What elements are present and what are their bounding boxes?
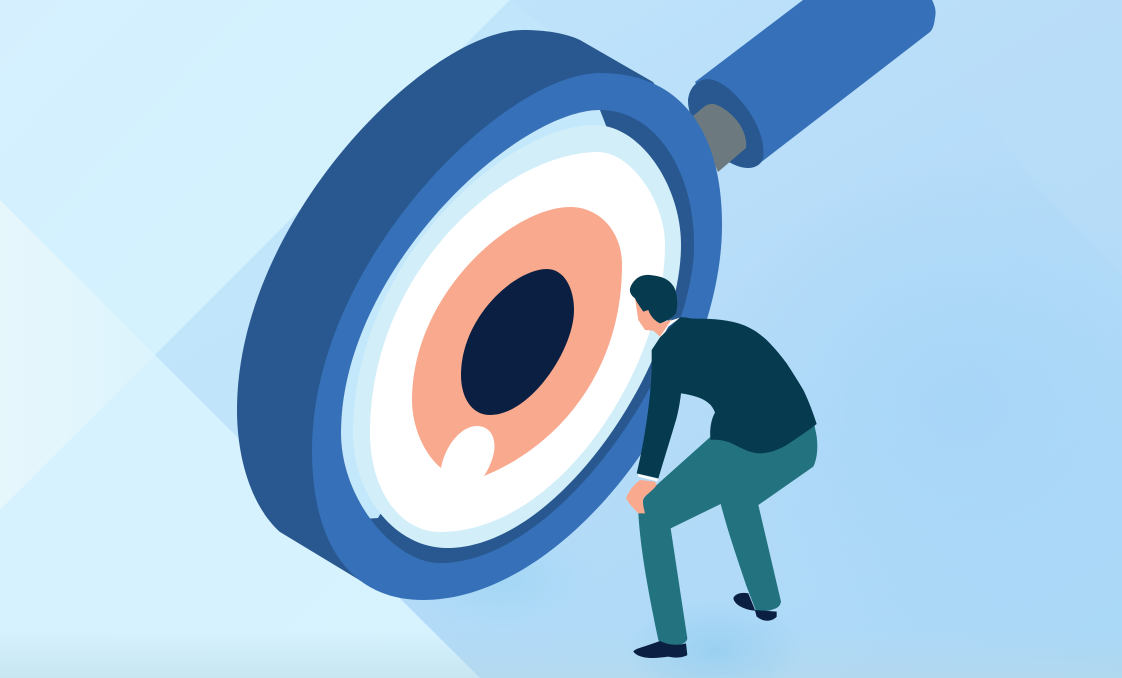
hair — [630, 275, 677, 323]
eye: pupil — [461, 269, 574, 415]
handle barrel — [695, 0, 936, 163]
lens rim front — [312, 73, 722, 600]
inner rim shadow — [341, 110, 694, 563]
eye: iris — [412, 207, 622, 476]
shirt collar — [660, 317, 681, 338]
shadow under man — [625, 600, 805, 678]
eye: pale outer — [353, 125, 681, 548]
face — [635, 297, 672, 337]
shadow under magnifying glass — [405, 530, 595, 630]
rear shoe — [733, 593, 777, 621]
front shoe — [633, 641, 687, 658]
lens glass highlight — [330, 105, 607, 521]
jacket — [637, 317, 817, 478]
man — [626, 275, 817, 658]
eye: white sclera — [370, 152, 665, 532]
shirt cuff — [638, 474, 658, 481]
eye: reflection — [441, 426, 494, 478]
back leg trousers and hip — [638, 417, 817, 646]
lens rim depth — [237, 30, 660, 581]
handle end cap — [688, 79, 763, 168]
hand — [626, 480, 657, 513]
magnifying glass lens — [237, 30, 722, 600]
metal neck — [693, 104, 746, 172]
magnifying glass handle — [688, 0, 936, 172]
